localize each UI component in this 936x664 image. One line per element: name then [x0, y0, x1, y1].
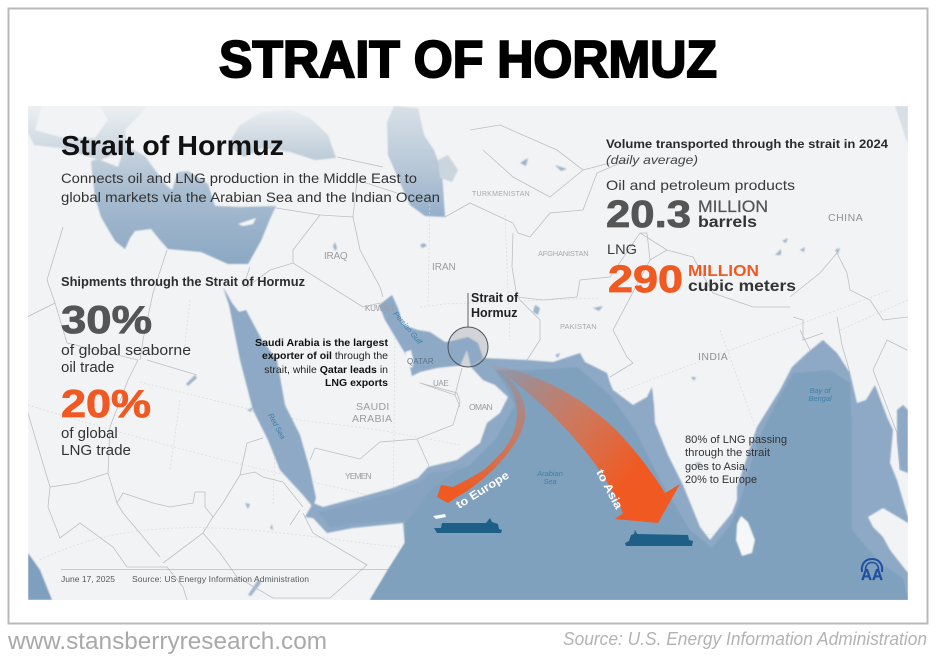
label: Kuwait: KUWAIT [365, 304, 395, 313]
sea: Atlantic corner [28, 553, 52, 600]
callout line one: Saudi Arabia is the largest [255, 337, 388, 349]
label: Strait of Hormuz locator: Strait of [471, 291, 519, 305]
country borders [27, 360, 367, 600]
label: UAE: UAE [433, 379, 449, 388]
logo letters: AA [861, 567, 883, 584]
map subheading line one: Connects oil and LNG production in the Middle East to [61, 171, 417, 186]
LNG label: LNG [607, 241, 637, 257]
label: India: INDIA [698, 351, 728, 363]
shipments heading: Shipments through the Strait of Hormuz [61, 275, 305, 289]
stat label: seaborne oil: oil trade [61, 359, 114, 376]
label: Oman: OMAN [469, 402, 493, 412]
callout line two: exporter of oil through the [262, 350, 388, 362]
strait locator [448, 293, 488, 367]
sea: Gulf of Thailand [897, 405, 908, 473]
map land background [28, 106, 908, 600]
stat unit: cubic meters: cubic meters [688, 278, 796, 295]
sea: Persian Gulf [379, 295, 483, 376]
icon: Anadolu Agency logo [861, 559, 883, 584]
label: Strait of Hormuz locator: Hormuz [471, 306, 518, 320]
label: Saudi Arabia: SAUDI [356, 401, 390, 413]
island: Cyprus [238, 218, 256, 226]
icon: ship to Europe [434, 518, 502, 533]
land: Qatar peninsula [405, 350, 414, 368]
stat unit: million: MILLION [698, 197, 768, 216]
stat unit: million orange: MILLION [688, 263, 759, 280]
label: Iran: IRAN [432, 262, 456, 273]
callout: LNG split [685, 434, 787, 486]
callout: Saudi Arabia and Qatar [255, 337, 388, 389]
label: Yemen: YEMEN [345, 471, 372, 481]
map labels [324, 191, 863, 481]
sea: Aral Sea [438, 155, 458, 182]
label: Qatar: QATAR [407, 357, 434, 366]
stat: 20%: 20% [61, 383, 151, 426]
split line two: through the strait [685, 447, 770, 459]
locator leader line [467, 293, 469, 327]
title: STRAIT OF HORMUZ [219, 31, 717, 89]
volume heading: Volume transported through the strait in 2024 [606, 137, 888, 151]
sea: top right corner [895, 106, 908, 145]
icon: ship to Asia [625, 530, 693, 546]
label: Afghanistan: AFGHANISTAN [538, 249, 589, 258]
split line four: 20% to Europe [685, 474, 757, 486]
arrow: to Europe [437, 364, 525, 503]
land: Sri Lanka [736, 516, 755, 556]
callout line four: LNG exports [325, 377, 388, 389]
locator circle fill [448, 327, 488, 367]
label: Bay of Bengal: Bay of [809, 386, 832, 395]
panel: shipments [61, 275, 305, 459]
panel: volume [606, 137, 888, 301]
sea: Mediterranean [91, 147, 276, 264]
stat label: seaborne oil: of global seaborne [61, 342, 191, 359]
sea: Black Sea [228, 110, 336, 160]
label: Bay of Bengal: Bengal [808, 394, 832, 403]
label: to Asia: to Asia [593, 468, 624, 512]
arrow: to Asia [490, 364, 680, 523]
land: Socotra [433, 514, 446, 519]
label: China: CHINA [828, 212, 863, 224]
lakes [186, 158, 840, 596]
stat label: LNG: LNG trade [61, 442, 131, 459]
map bottom rule [61, 569, 853, 570]
map subheading line two: global markets via the Arabian Sea and the Indian Ocean [61, 190, 440, 205]
split line three: goes to Asia, [685, 461, 748, 473]
label: Arabian Sea: Arabian [536, 469, 563, 478]
heading block [61, 130, 440, 205]
label: Turkmenistan: TURKMENISTAN [472, 191, 530, 198]
label: Red Sea: Red Sea [266, 412, 287, 441]
source: Source: US Energy Information Administration [132, 574, 309, 584]
sea: Gulf of Aden [318, 460, 470, 528]
sea: deep water [370, 367, 908, 600]
date: June 17, 2025 [61, 574, 115, 584]
panel: map [27, 106, 908, 600]
sea: Indian Ocean and Arabian Sea [305, 340, 908, 600]
stat label: LNG: of global [61, 425, 118, 442]
oil label: Oil and petroleum products [606, 177, 795, 193]
stat: 20.3: 20.3 [606, 194, 691, 236]
label: Saudi Arabia: ARABIA [352, 413, 392, 425]
footer date and source [61, 574, 309, 584]
stat: 290: 290 [608, 259, 683, 301]
graticule lines [28, 200, 908, 560]
label: Iraq: IRAQ [324, 251, 348, 262]
footer: source: Source: U.S. Energy Information Administration [563, 629, 927, 649]
sea: Red Sea [223, 287, 316, 507]
label: to Europe: to Europe [454, 470, 511, 512]
label: Pakistan: PAKISTAN [560, 322, 597, 331]
footer: website: www.stansberryresearch.com [7, 628, 327, 655]
stat: 30%: 30% [61, 299, 152, 342]
locator circle [448, 327, 488, 367]
label: Arabian Sea: Sea [543, 477, 557, 486]
map heading: Strait of Hormuz [61, 130, 284, 161]
volume subheading: (daily average) [606, 153, 698, 167]
sea: upper Mediterranean fade [28, 106, 148, 160]
label: Persian Gulf: Persian Gulf [391, 310, 425, 347]
callout line three: strait, while Qatar leads in [264, 364, 388, 376]
split line one: 80% of LNG passing [685, 434, 787, 446]
sea: Caspian [387, 106, 445, 217]
stat unit: barrels: barrels [698, 214, 757, 231]
northern seas [28, 106, 908, 600]
